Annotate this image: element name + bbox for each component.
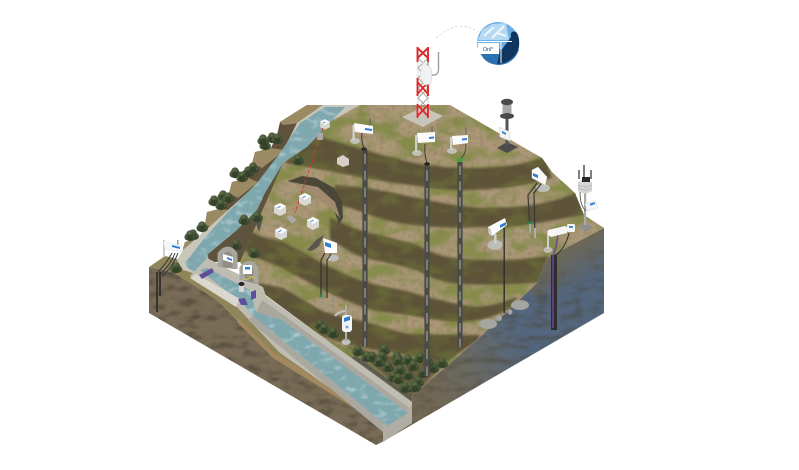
crack sensor A [299, 193, 311, 206]
lower blue panel [478, 49, 519, 65]
right bedrock face [380, 225, 608, 445]
intake gates [199, 249, 256, 305]
rear stepped terraces [183, 105, 345, 262]
wall sensor [337, 155, 349, 167]
olive strip above channel wall [283, 316, 405, 392]
crack sensor C [307, 217, 319, 230]
cloud platform badge [477, 22, 519, 65]
yellow cable [243, 277, 255, 280]
piezometer station [544, 224, 575, 330]
ground patches [479, 300, 529, 329]
left soil face [149, 267, 383, 445]
left corner station [156, 240, 182, 312]
purple cable [553, 233, 558, 328]
gauge housing B [242, 264, 256, 284]
upper channel water [185, 107, 345, 272]
lower channel outer wall shadow [383, 406, 412, 442]
weir crossing [190, 274, 240, 307]
logger [585, 200, 598, 211]
purple gates [199, 268, 256, 305]
riser moss [248, 137, 584, 360]
left bank ground strip [149, 256, 384, 425]
logger on stand, plateau centre [412, 126, 435, 166]
hillside ground [235, 100, 610, 410]
radiation shield [578, 165, 592, 194]
panel frame [477, 42, 512, 63]
mid logger with pole [488, 218, 507, 313]
crack sensor B [274, 203, 286, 216]
black cable [556, 233, 569, 255]
logger [499, 127, 510, 141]
base plate [579, 223, 593, 232]
logger on stand, plateau right [447, 128, 468, 162]
left bank tan edge [237, 317, 382, 424]
terrace risers, soft edged [235, 133, 586, 403]
deep monitoring rods [362, 150, 463, 376]
landslide sensors [274, 119, 349, 312]
level sensor [238, 282, 244, 292]
mast antenna [177, 240, 178, 248]
map detail [484, 26, 506, 38]
logger [163, 240, 182, 257]
rod 3 [457, 162, 463, 347]
logger on stand, plateau left [350, 118, 373, 151]
rod 2 [424, 166, 430, 376]
radio panel [420, 62, 432, 85]
cable [580, 192, 586, 211]
red laser link [295, 128, 323, 213]
landslide scarp [256, 176, 343, 251]
isometric terrain block [145, 100, 610, 450]
lower channel inner wall [248, 300, 412, 432]
data link arc [436, 26, 478, 38]
borehole [551, 255, 557, 330]
pole [506, 112, 508, 145]
rock strip along right wall [352, 355, 412, 401]
antenna [428, 52, 438, 75]
borehole [156, 272, 161, 312]
gauge housing A [220, 249, 235, 269]
upper channel walls [177, 105, 360, 283]
weather station: compact sensor [578, 165, 598, 232]
terrace sensors, right [479, 167, 575, 330]
gauge head [500, 99, 514, 119]
lower channel water [200, 268, 408, 426]
lower channel walls [190, 258, 412, 442]
base plate [497, 142, 518, 153]
hillside logger [320, 238, 339, 312]
crack sensor D [275, 227, 287, 240]
cable bundle [158, 253, 178, 276]
plateau sensors [350, 118, 468, 166]
logger [548, 224, 575, 237]
communication tower [402, 47, 443, 127]
lower terrace sensor [335, 305, 352, 345]
dashboard label: Onl* [483, 47, 493, 53]
bushes [170, 132, 448, 393]
grey targets [286, 133, 323, 224]
weather station: rain gauge [497, 99, 518, 153]
dark silhouette [497, 32, 519, 64]
dashboard map [478, 23, 509, 40]
pole [584, 192, 586, 225]
wireless sensor top [320, 119, 330, 130]
lattice mast [418, 47, 428, 118]
concrete base slab [402, 107, 443, 127]
rod 1 [362, 150, 368, 347]
upper logger with probes [528, 167, 550, 238]
